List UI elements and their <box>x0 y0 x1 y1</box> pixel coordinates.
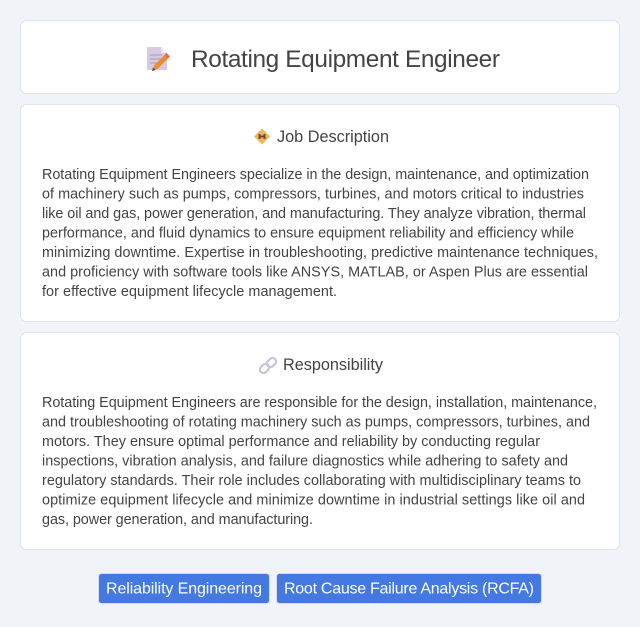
text block: responsibility: motors. They ensure optimal performance and reliability by conducting regular <box>42 434 540 450</box>
text block: responsibility <box>42 395 597 528</box>
text block: responsibility: Rotating Equipment Engineers are responsible for the design, installation, maintenance, <box>42 395 597 411</box>
text block: job description: Rotating Equipment Engineers specialize in the design, maintenance, and optimization <box>42 167 589 183</box>
title text: Rotating Equipment Engineer <box>191 46 500 73</box>
panel: responsibility <box>20 332 620 550</box>
icon: chain link <box>258 356 278 375</box>
text block: job description: and proficiency with software tools like ANSYS, MATLAB, or Aspen Plus are essential <box>42 264 588 280</box>
tag: reliability engineering: Reliability Engineering <box>106 580 262 598</box>
panel: title <box>20 20 620 94</box>
text block: job description: minimizing downtime. Expertise in troubleshooting, predictive maintenance techniques, <box>42 245 598 261</box>
text block: responsibility: gas, power generation, and manufacturing. <box>42 512 313 528</box>
heading: job description: Job Description <box>277 128 389 146</box>
text block: job description: for effective equipment lifecycle management. <box>42 284 337 300</box>
text block: job description <box>42 167 598 300</box>
text block: job description: of machinery such as pumps, compressors, turbines, and motors critical to industries <box>42 186 584 202</box>
text block: responsibility: optimize equipment lifecycle and minimize downtime in industrial settings like oil and <box>42 492 585 508</box>
tag: root cause failure analysis <box>276 574 542 604</box>
tag: root cause failure analysis: Root Cause Failure Analysis (RCFA) <box>284 580 534 598</box>
tag: reliability engineering <box>98 574 270 604</box>
icon: orange diamond <box>254 128 270 144</box>
icon: memo with pencil <box>147 47 170 71</box>
text block: responsibility: and troubleshooting of rotating machinery such as pumps, compressors, turbines, and <box>42 414 590 430</box>
text block: job description: like oil and gas, power generation, and manufacturing. They analyze vibration, thermal <box>42 206 586 222</box>
panel: job description <box>20 104 620 322</box>
heading: responsibility: Responsibility <box>283 356 384 374</box>
text block: responsibility: regulatory standards. Their role includes collaborating with multidisciplinary teams to <box>42 473 581 489</box>
text block: job description: performance, and fluid dynamics to ensure equipment reliability and efficiency while <box>42 226 574 242</box>
text block: responsibility: inspections, vibration analysis, and failure diagnostics while adhering to safety and <box>42 454 568 470</box>
